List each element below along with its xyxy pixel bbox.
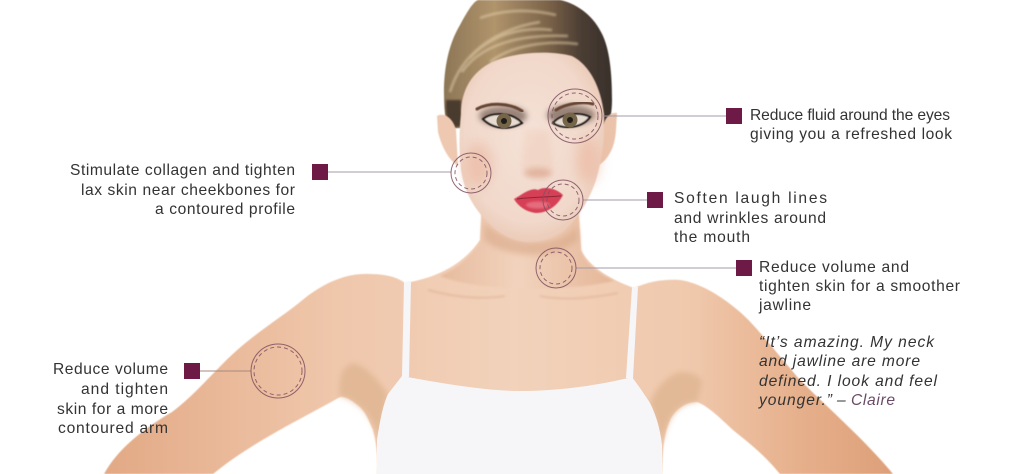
left ear xyxy=(437,115,458,166)
lips xyxy=(514,188,563,213)
hair highlights xyxy=(450,11,578,92)
marker xyxy=(726,108,742,124)
label: tighten skin for a smoother xyxy=(759,278,960,295)
left eye xyxy=(483,114,522,128)
right cheek blush xyxy=(576,136,600,184)
label: the mouth xyxy=(674,229,750,246)
model photo illustration xyxy=(104,0,893,474)
leader line xyxy=(583,199,647,201)
label: Reduce volume xyxy=(53,361,168,378)
target circle xyxy=(543,180,583,220)
right underarm fold xyxy=(650,372,702,445)
testimonial quote: – xyxy=(836,392,846,409)
marker xyxy=(184,363,200,379)
right ear xyxy=(599,113,617,165)
chin shadow xyxy=(484,222,578,255)
body silhouette with arms, neck and chest xyxy=(104,205,893,474)
label: contoured arm xyxy=(58,420,168,437)
nose base xyxy=(524,168,552,178)
label: Reduce fluid around the eyes xyxy=(750,107,950,124)
leader line xyxy=(328,171,451,173)
marker xyxy=(736,260,752,276)
leader line xyxy=(200,370,251,372)
left cheek blush xyxy=(464,143,492,187)
right strap xyxy=(626,287,638,378)
dark hair at left temple xyxy=(446,100,462,128)
right eye xyxy=(553,112,590,128)
testimonial quote: younger.” xyxy=(758,392,833,409)
target circle xyxy=(451,153,491,193)
left underarm fold xyxy=(339,364,388,440)
marker xyxy=(647,192,663,208)
left eye makeup xyxy=(479,106,527,126)
face xyxy=(460,53,604,242)
label: lax skin near cheekbones for xyxy=(81,182,295,199)
label: jawline xyxy=(758,297,811,314)
left strap xyxy=(402,281,411,377)
label: Reduce volume and xyxy=(759,259,909,276)
testimonial quote: “It’s amazing. My neck xyxy=(759,334,935,351)
label: giving you a refreshed look xyxy=(750,126,952,143)
callout: arm xyxy=(53,344,305,437)
nose shadow xyxy=(522,130,553,176)
label: Soften laugh lines xyxy=(674,190,827,207)
label: and wrinkles around xyxy=(674,210,826,227)
testimonial quote: defined. I look and feel xyxy=(759,373,938,390)
label: Stimulate collagen and tighten xyxy=(70,162,295,179)
target circle xyxy=(536,248,576,288)
label: a contoured profile xyxy=(155,201,295,218)
callout: jawline xyxy=(536,248,960,314)
target circle xyxy=(548,89,602,143)
tank top xyxy=(377,376,662,474)
marker xyxy=(312,164,328,180)
neck tone xyxy=(440,205,614,289)
callout: cheekbones xyxy=(70,153,491,218)
testimonial quote: Claire xyxy=(851,392,895,409)
eyebrows xyxy=(477,103,593,111)
callout: mouth xyxy=(543,180,827,246)
head back hair xyxy=(444,0,612,130)
callout: eyes xyxy=(548,89,952,143)
leader line xyxy=(576,267,736,269)
target circle xyxy=(251,344,305,398)
right eye makeup xyxy=(547,105,595,125)
label: skin for a more xyxy=(57,401,168,418)
testimonial quote: and jawline are more xyxy=(759,353,920,370)
collarbones xyxy=(428,290,618,299)
leader line xyxy=(603,115,726,117)
label: and tighten xyxy=(81,381,168,398)
